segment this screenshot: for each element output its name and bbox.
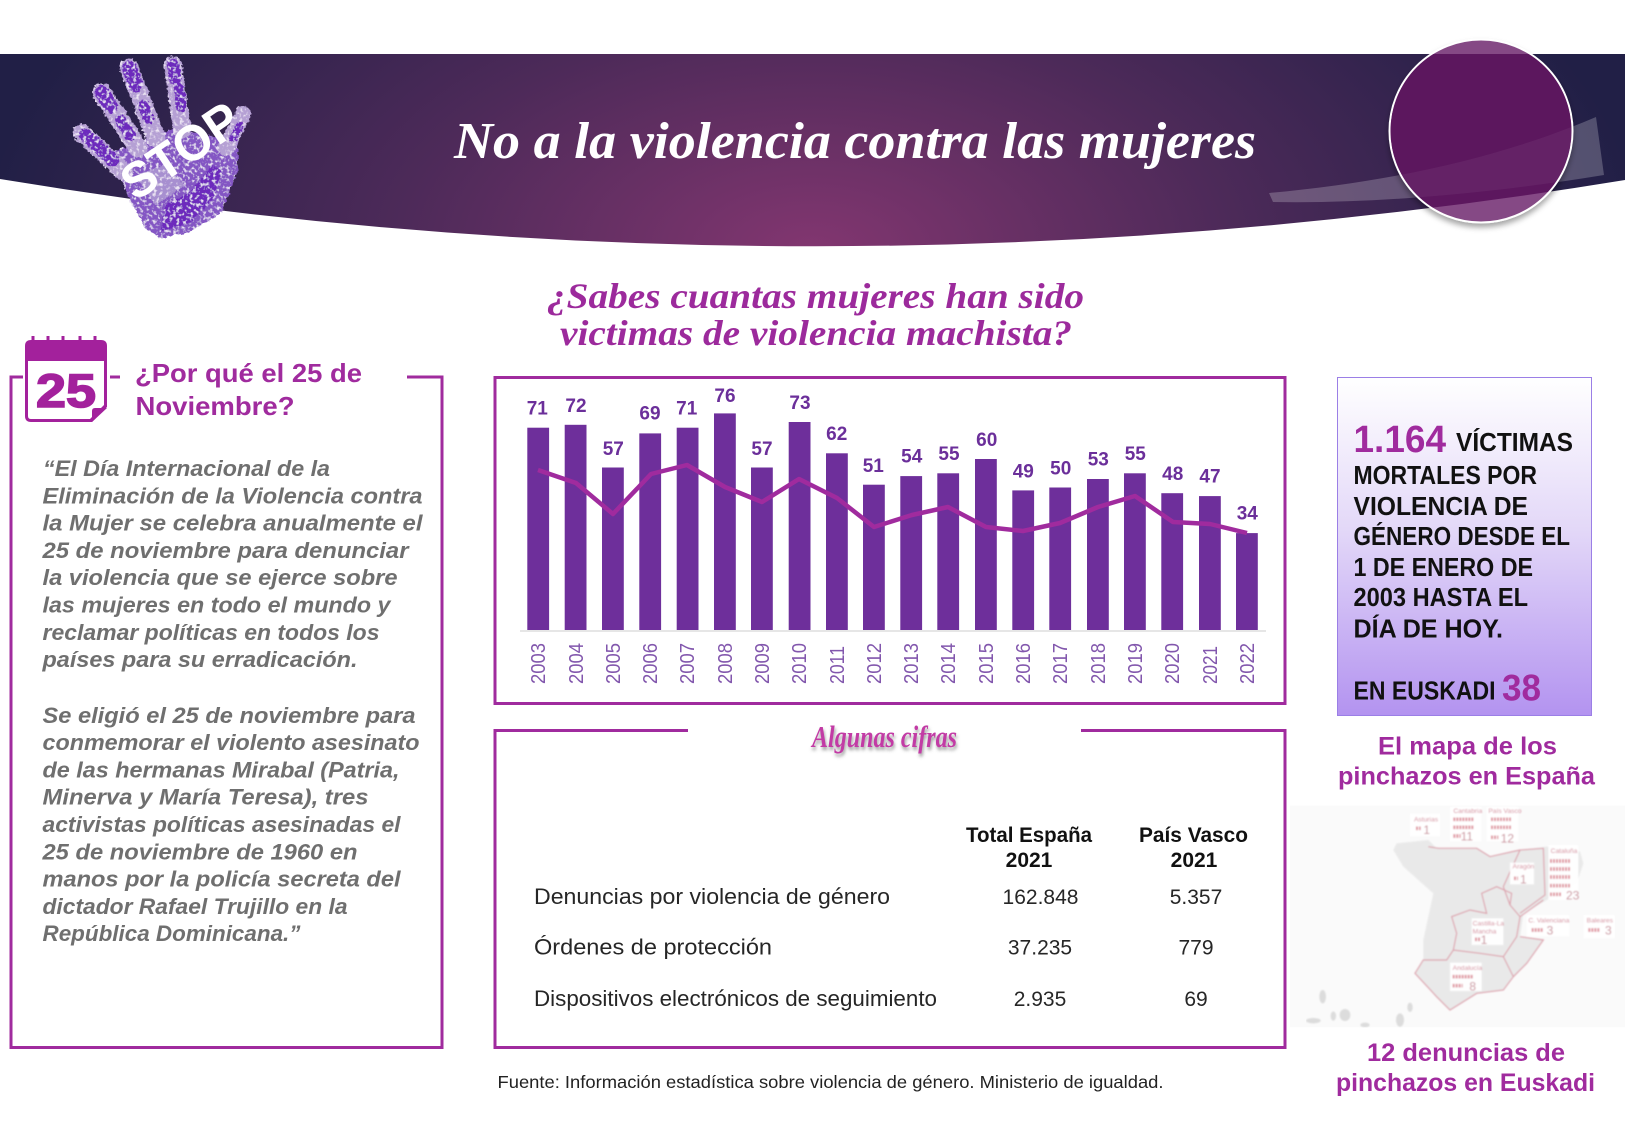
year labels: 2012 [864, 643, 886, 684]
table row: órdenes: 37.235 [1008, 936, 1072, 960]
year labels: 2009 [752, 643, 774, 684]
text block: explanation second paragraph: República Dominicana.” [42, 921, 300, 946]
text block: explanation second paragraph: dictador Rafael Trujillo en la [42, 894, 348, 919]
year labels: 2021 [1200, 646, 1222, 684]
value labels: 60 [976, 430, 997, 451]
map heading: El mapa de los [1378, 732, 1557, 760]
table row: denuncias [534, 884, 1222, 909]
map of spain: 1 [1481, 933, 1488, 947]
map of spain: C. Valenciana [1528, 917, 1570, 924]
text block: explanation second paragraph: Se eligió el 25 de noviembre para [42, 703, 416, 728]
map of spain: Baleares [1587, 917, 1614, 924]
icon: decorative circle [1387, 40, 1576, 231]
text block: explanation second paragraph: Minerva y María Teresa), tres [42, 785, 368, 810]
text block: explanation first paragraph: la violencia que se ejerce sobre [42, 565, 398, 590]
table row: órdenes [534, 934, 1214, 960]
year labels: 2008 [715, 643, 737, 684]
icon: calendar 25: 25 [36, 364, 96, 417]
table header: País Vasco [1139, 824, 1248, 847]
year labels: 2019 [1125, 643, 1147, 684]
header banner [0, 54, 1625, 246]
map of spain: Mancha [1473, 928, 1497, 935]
text block: explanation second paragraph: 25 de noviembre de 1960 en [41, 839, 358, 864]
euskadi caption: pinchazos en Euskadi [1336, 1069, 1595, 1097]
table row: dispositivos: 2.935 [1014, 988, 1066, 1011]
text block: explanation first paragraph: las mujeres en todo el mundo y [42, 592, 392, 618]
year labels: 2003 [528, 643, 550, 684]
year labels: 2010 [789, 643, 811, 684]
value labels: 55 [1125, 444, 1146, 465]
value labels: 72 [565, 396, 587, 417]
panel: total victims callout: VIOLENCIA DE [1354, 491, 1528, 521]
map of spain: Aragón [1513, 864, 1534, 871]
panel: total victims callout: VÍCTIMAS [1456, 427, 1573, 457]
year labels [528, 643, 1259, 684]
icon: calendar 25 [25, 336, 107, 422]
panel: total victims callout: 2003 HASTA EL [1354, 582, 1528, 612]
map of spain: Cantabria [1453, 808, 1482, 815]
map of spain: 1 [1423, 823, 1430, 837]
euskadi caption: 12 denuncias de [1367, 1039, 1565, 1067]
value labels: 51 [863, 456, 884, 477]
table row: dispositivos: Dispositivos electrónicos de seguimiento [534, 986, 937, 1011]
panel: por qué el 25 de noviembre [11, 336, 442, 1048]
value labels: 53 [1088, 450, 1109, 471]
year labels: 2014 [938, 643, 960, 684]
table row: denuncias: 162.848 [1003, 886, 1078, 909]
map of spain: País Vasco [1488, 808, 1522, 815]
text block: explanation second paragraph: de las hermanas Mirabal (Patria, [42, 757, 399, 782]
year labels: 2004 [566, 643, 588, 684]
chart heading [547, 276, 1084, 353]
year labels: 2017 [1050, 643, 1072, 684]
value labels [527, 386, 1258, 524]
map of spain: Cataluña [1551, 848, 1578, 855]
bars [527, 413, 1258, 630]
map of spain: 12 [1501, 832, 1514, 846]
year labels: 2011 [827, 646, 849, 684]
text block: explanation first paragraph: 25 de noviembre para denunciar [41, 538, 410, 563]
year labels: 2015 [976, 643, 998, 684]
value labels: 69 [639, 404, 661, 424]
value labels: 76 [714, 386, 736, 407]
value labels: 50 [1050, 459, 1071, 480]
value labels: 54 [901, 447, 923, 468]
map of spain: 1 [1520, 872, 1527, 886]
text block: explanation first paragraph: la Mujer se celebra anualmente el [42, 511, 423, 536]
text block: explanation first paragraph: reclamar políticas en todos los [42, 620, 380, 645]
value labels: 55 [938, 444, 960, 465]
table row: denuncias: Denuncias por violencia de género [534, 884, 890, 909]
year labels: 2007 [677, 643, 699, 684]
icon: stop hand [82, 65, 251, 238]
panel: bar chart [495, 378, 1285, 704]
year labels: 2018 [1088, 643, 1110, 684]
trend line [538, 465, 1247, 533]
table row: dispositivos [534, 986, 1208, 1011]
value labels: 62 [826, 424, 847, 445]
table row: órdenes: Órdenes de protección [534, 934, 772, 960]
value labels: 73 [789, 393, 811, 414]
year labels: 2005 [603, 643, 625, 684]
panel: total victims callout: 38 [1502, 668, 1541, 708]
value labels: 47 [1199, 467, 1221, 488]
map of spain: 3 [1547, 924, 1554, 938]
chart heading: ¿Sabes cuantas mujeres han sido [547, 276, 1084, 316]
table row: denuncias: 5.357 [1170, 886, 1222, 909]
map heading: pinchazos en España [1338, 762, 1596, 790]
panel: total victims callout: DÍA DE HOY. [1354, 614, 1503, 644]
panel heading: ¿Por qué el 25 de [135, 358, 362, 388]
title: No a la violencia contra las mujeres [453, 113, 1256, 170]
year labels: 2022 [1237, 643, 1259, 684]
chart heading: victimas de violencia machista? [560, 313, 1072, 353]
table row: dispositivos: 69 [1184, 988, 1208, 1011]
map of spain: 23 [1566, 888, 1580, 902]
year labels: 2013 [901, 643, 923, 684]
value labels: 49 [1013, 461, 1034, 482]
table header: 2021 [1006, 849, 1053, 872]
year labels: 2016 [1013, 643, 1035, 684]
map of spain: 11 [1461, 830, 1473, 844]
text block: explanation second paragraph: activistas políticas asesinadas el [42, 812, 401, 837]
table header [966, 824, 1248, 872]
panel: total victims callout: 1.164 [1354, 419, 1446, 461]
panel: algunas cifras table [495, 719, 1285, 1048]
value labels: 71 [527, 398, 548, 420]
year labels: 2006 [640, 643, 662, 684]
value labels: 34 [1237, 504, 1258, 524]
table header: 2021 [1171, 849, 1218, 872]
panel heading: algunas cifras: Algunas cifras [810, 719, 957, 754]
text block: explanation second paragraph: manos por la policía secreta del [42, 867, 401, 892]
table row: órdenes: 779 [1178, 936, 1214, 960]
panel: total victims callout: EN EUSKADI [1354, 676, 1496, 706]
year labels: 2020 [1162, 643, 1184, 684]
STOP text: STOP [110, 91, 251, 211]
map of spain: Castilla-La [1473, 920, 1504, 927]
text block: explanation second paragraph [41, 703, 420, 946]
panel: total victims callout: 1 DE ENERO DE [1354, 552, 1533, 582]
value labels: 71 [676, 398, 698, 420]
map of spain: Andalucía [1453, 965, 1483, 972]
map of spain [1290, 806, 1625, 1027]
map of spain: 8 [1469, 980, 1476, 994]
text block: explanation first paragraph: Eliminación de la Violencia contra [42, 483, 423, 508]
text block: explanation second paragraph: conmemorar el violento asesinato [42, 730, 420, 755]
text block: explanation first paragraph [41, 456, 423, 672]
value labels: 57 [751, 439, 773, 460]
source note: Fuente: Información estadística sobre violencia de género. Ministerio de igualdad. [498, 1072, 1164, 1092]
table header: Total España [966, 824, 1092, 847]
panel heading [135, 358, 362, 421]
text block: explanation first paragraph: países para su erradicación. [41, 647, 358, 672]
panel heading: Noviembre? [136, 391, 294, 421]
map of spain: 3 [1605, 924, 1612, 938]
map of spain: Asturias [1414, 817, 1439, 824]
map heading [1338, 732, 1596, 790]
value labels: 48 [1162, 464, 1183, 485]
panel: total victims callout: MORTALES POR [1354, 460, 1537, 490]
value labels: 57 [603, 439, 624, 460]
panel: total victims callout: GÉNERO DESDE EL [1354, 521, 1570, 551]
text block: explanation first paragraph: “El Día Internacional de la [43, 456, 330, 481]
panel: total victims callout [1338, 378, 1592, 716]
euskadi caption [1336, 1039, 1595, 1097]
